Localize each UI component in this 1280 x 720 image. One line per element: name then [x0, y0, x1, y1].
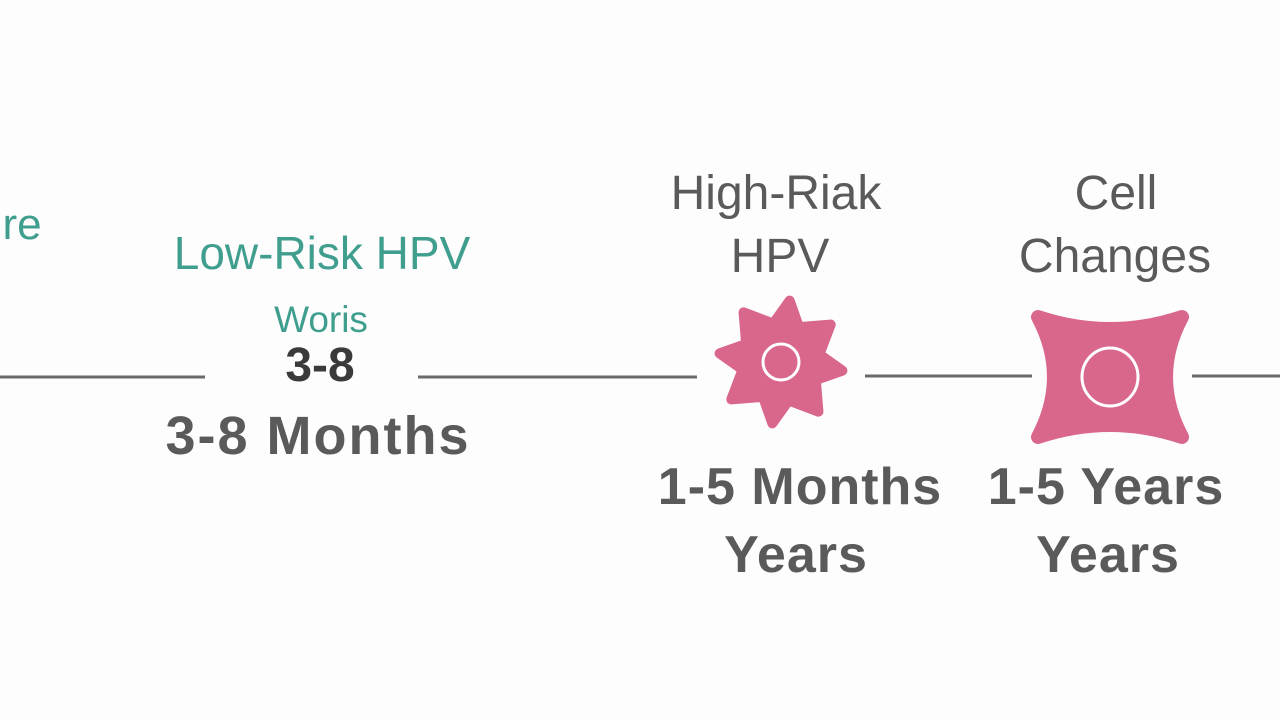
stage: cell changes: Years: [1036, 526, 1180, 584]
duration: 1-5 Months Years: 1-5 Months: [658, 458, 942, 516]
stage: high-risk HPV: Years: [724, 526, 868, 584]
subheading: Worts: Woris: [274, 299, 368, 340]
partial label: re: re: [2, 200, 42, 249]
heading: Cell Changes: Cell: [1075, 167, 1157, 220]
stage: low-risk HPV: [165, 227, 471, 466]
stage: high-risk HPV: [658, 167, 942, 584]
duration: 3-8 Months: 3-8 Months: [165, 406, 471, 466]
duration: 1-5 Years Years: 1-5 Years: [988, 458, 1224, 516]
number: 3-8: 3-8: [285, 339, 355, 392]
heading: Low-Risk HPV: Low-Risk HPV: [174, 227, 470, 279]
heading: High-Riak HPV: High-Riak: [671, 167, 881, 220]
stage: cell changes: Changes: [1019, 230, 1211, 283]
icon: star-shaped pink cell: [714, 296, 848, 428]
stage: high-risk HPV: HPV: [731, 230, 829, 283]
stage: cell changes: [988, 167, 1224, 584]
icon: four-armed pink cell: [1031, 310, 1189, 444]
